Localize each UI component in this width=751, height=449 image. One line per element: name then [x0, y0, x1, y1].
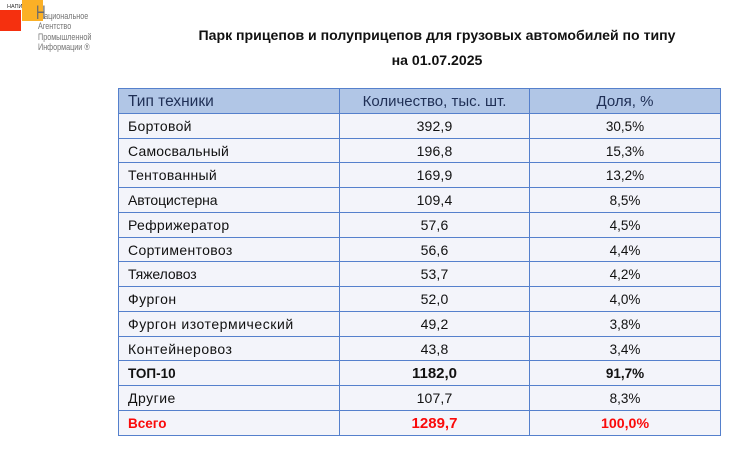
data table: Рефрижератор: [128, 217, 229, 233]
title: [198, 27, 676, 68]
title: Парк прицепов и полуприцепов для грузовых автомобилей по типу: [198, 27, 676, 43]
data table: Сортиментовоз: [128, 242, 233, 258]
data table: 4,4%: [610, 242, 640, 258]
data table: 4,5%: [610, 218, 640, 233]
data table: 1289,7: [412, 415, 457, 432]
logo big letter: Н: [36, 3, 46, 24]
data table: 8,5%: [610, 193, 640, 208]
logo text: Агентство: [38, 21, 71, 32]
data table: ТОП-10: [128, 366, 176, 381]
data table: 43,8: [421, 340, 448, 356]
data table: Другие: [128, 390, 176, 406]
data table: 4,0%: [610, 292, 640, 307]
logo: [0, 0, 91, 53]
logo orange square: [22, 0, 43, 21]
title: на 01.07.2025: [392, 52, 482, 68]
data table: 107,7: [417, 390, 452, 406]
data table: Тип техники: [128, 93, 214, 110]
data table: 1182,0: [412, 365, 457, 382]
data table: Количество, тыс. шт.: [363, 93, 506, 110]
data table: 52,0: [421, 291, 448, 307]
data table: Всего: [128, 416, 166, 431]
data table: Контейнеровоз: [128, 340, 232, 356]
logo red square: [0, 10, 21, 31]
data table: 13,2%: [606, 168, 644, 183]
logo label: НАПИ: [7, 4, 22, 10]
data table: 57,6: [421, 217, 448, 233]
data table: Фургон изотермический: [128, 316, 294, 332]
logo text: ациональное: [44, 11, 88, 22]
data table: Тяжеловоз: [128, 266, 197, 282]
logo text: Информации ®: [38, 42, 90, 53]
data table: Автоцистерна: [128, 192, 218, 208]
data table: Тентованный: [128, 167, 217, 183]
data table: Бортовой: [128, 118, 192, 134]
data table: 109,4: [417, 192, 452, 208]
data table: 30,5%: [606, 119, 644, 134]
data table: 15,3%: [606, 144, 644, 158]
logo text: [38, 11, 91, 53]
data table: 53,7: [421, 266, 448, 282]
logo text: Промышленной: [38, 32, 91, 43]
data table: 196,8: [417, 142, 452, 158]
data table: 8,3%: [610, 391, 640, 406]
data table: 169,9: [417, 167, 452, 183]
data table: [118, 88, 721, 436]
data table: 91,7%: [606, 366, 644, 381]
data table: 100,0%: [601, 416, 649, 432]
data table: 3,4%: [610, 342, 640, 356]
data table: 4,2%: [610, 267, 640, 282]
data table: Фургон: [128, 291, 177, 307]
data table: 49,2: [421, 316, 448, 332]
data table: Доля, %: [597, 93, 653, 110]
data table: 392,9: [417, 118, 452, 134]
data table: 3,8%: [610, 317, 640, 332]
data table: Самосвальный: [128, 142, 229, 158]
data table: 56,6: [421, 242, 448, 258]
